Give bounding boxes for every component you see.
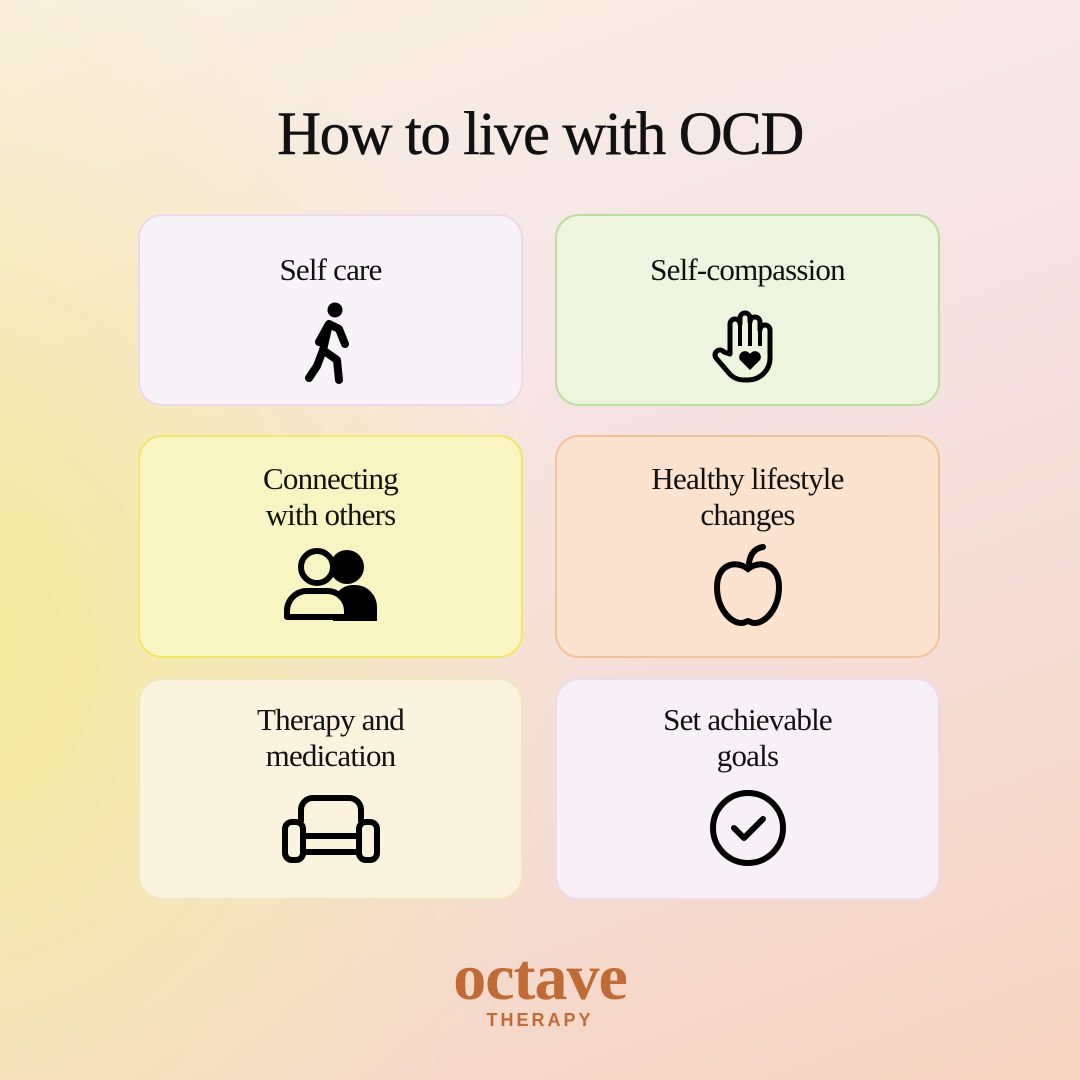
logo: octave bbox=[453, 941, 627, 1014]
heading: healthy lifestyle changes: Healthy lifestyle bbox=[651, 461, 844, 496]
heading: healthy lifestyle changes: changes bbox=[700, 497, 795, 532]
heading: connecting with others: with others bbox=[266, 497, 395, 532]
panel: therapy and medication bbox=[138, 678, 523, 900]
title: How to live with OCD bbox=[277, 101, 803, 168]
panel: self-compassion bbox=[555, 214, 940, 406]
panel: connecting with others bbox=[138, 435, 523, 658]
heading: set achievable goals: goals bbox=[717, 738, 778, 773]
heading: therapy and medication: Therapy and bbox=[257, 702, 404, 737]
heading: connecting with others bbox=[263, 461, 398, 532]
heading: connecting with others: Connecting bbox=[263, 461, 398, 496]
heading: therapy and medication bbox=[257, 702, 404, 773]
heading: self-compassion: Self-compassion bbox=[650, 252, 845, 287]
icon: apple bbox=[714, 544, 782, 626]
panel: healthy lifestyle changes bbox=[555, 435, 940, 658]
icon: people bbox=[284, 548, 377, 621]
icon: walking person bbox=[305, 302, 349, 384]
heading: self care: Self care bbox=[279, 252, 382, 287]
heading: healthy lifestyle changes bbox=[651, 461, 844, 532]
heading: set achievable goals bbox=[663, 702, 832, 773]
icon: sofa bbox=[282, 795, 380, 863]
panel: set achievable goals bbox=[555, 678, 940, 900]
heading: set achievable goals: Set achievable bbox=[663, 702, 832, 737]
panel: self care bbox=[138, 214, 523, 406]
icon: check circle bbox=[710, 790, 786, 866]
heading: therapy and medication: medication bbox=[266, 738, 395, 773]
icon: hand with heart bbox=[712, 310, 772, 382]
logo: THERAPY bbox=[486, 1010, 594, 1030]
